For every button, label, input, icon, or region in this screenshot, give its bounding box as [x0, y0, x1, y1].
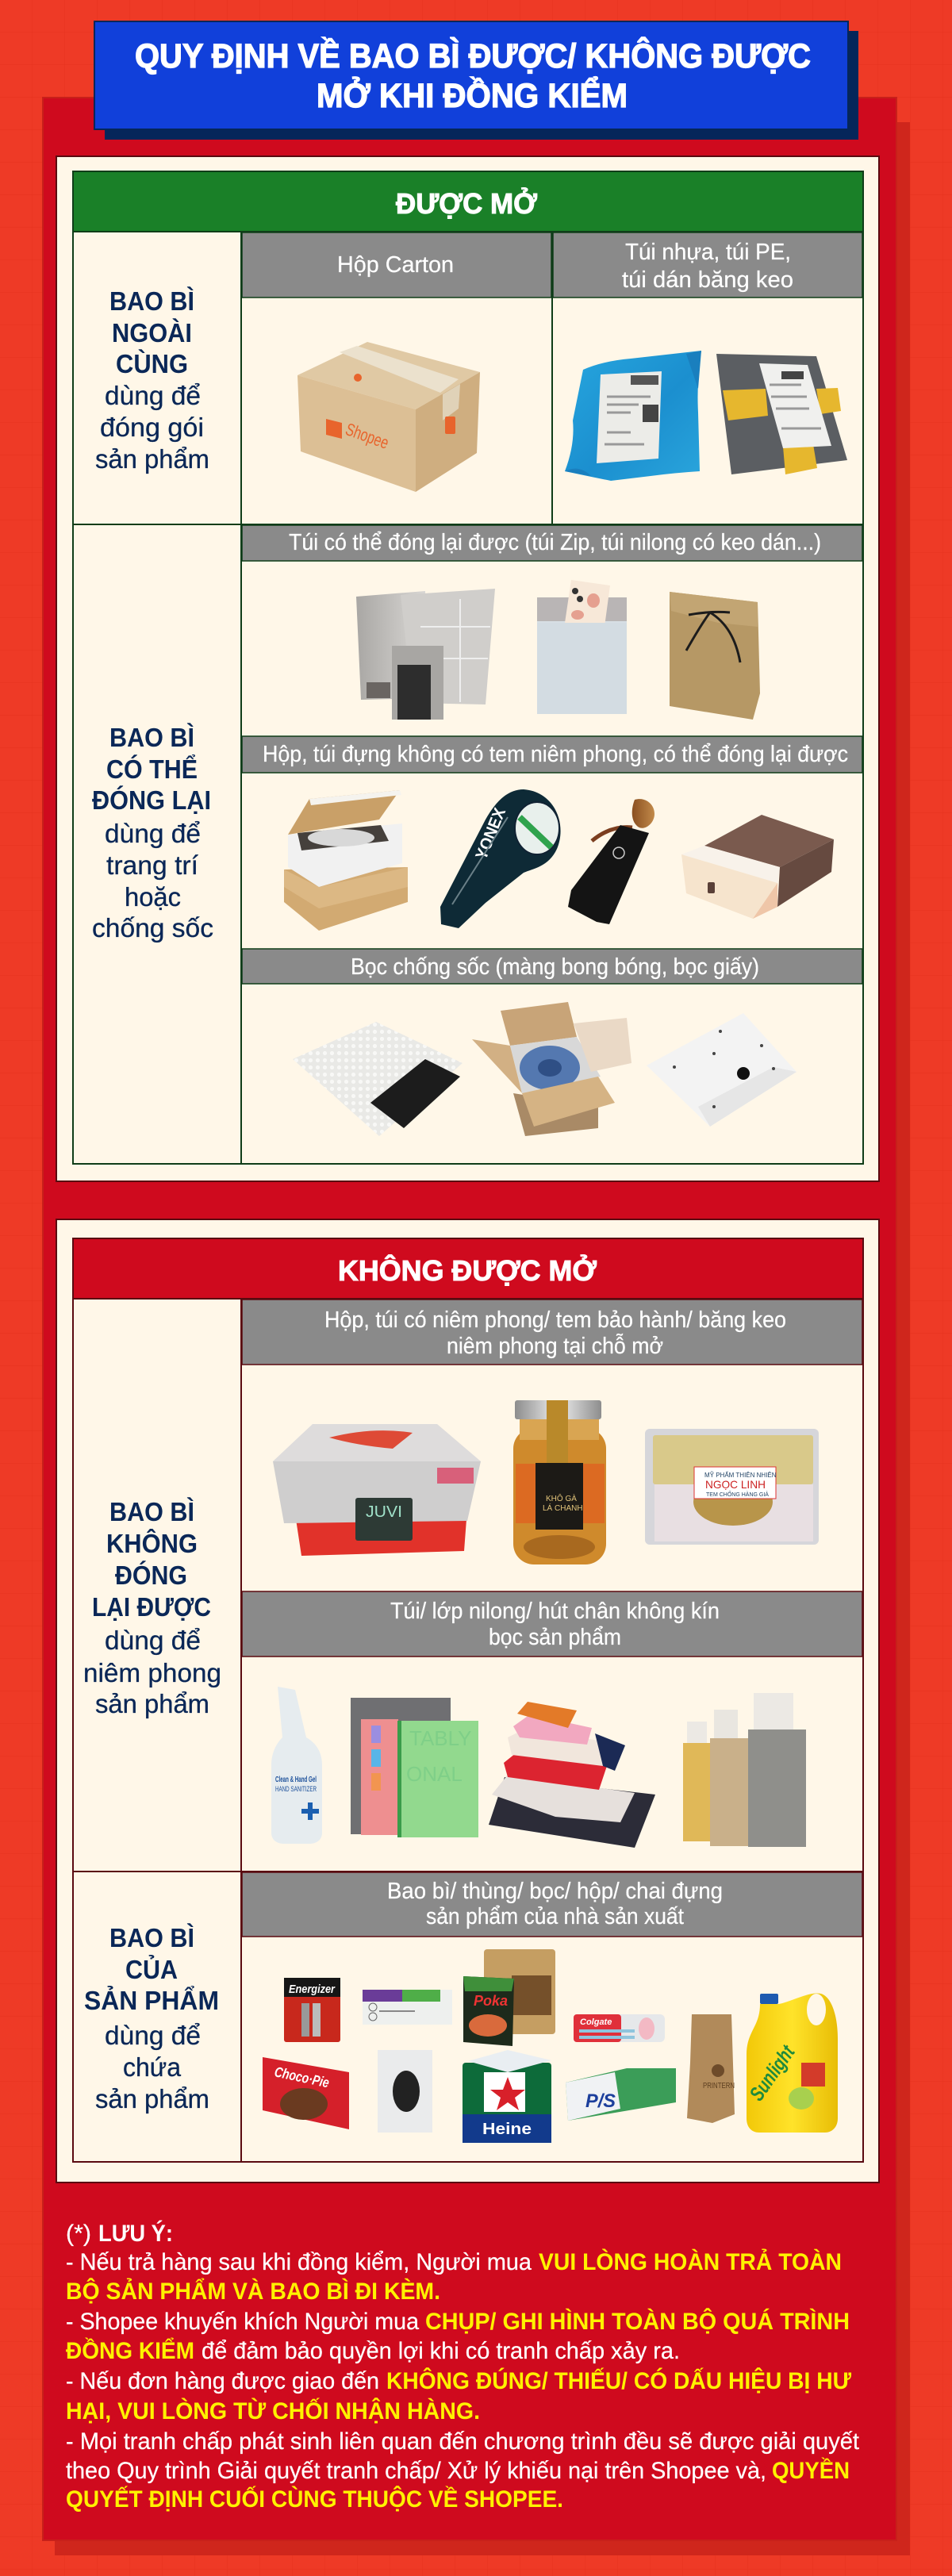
row label: bao bì không đóng lại được: KHÔNG: [106, 1528, 198, 1558]
row label: bao bì không đóng lại được: niêm phong: [83, 1658, 221, 1687]
icon: sanitizer bottle: Clean & Hand Gel: [275, 1776, 317, 1784]
sub-header: bọc chống sốc: [242, 949, 862, 984]
heading: không được mở: KHÔNG ĐƯỢC MỞ: [338, 1253, 597, 1287]
row label: bao bì của sản phẩm: sản phẩm: [95, 2084, 209, 2113]
title banner: MỞ KHI ĐỒNG KIỂM: [317, 76, 628, 115]
row label: bao bì không đóng lại được: [83, 1497, 221, 1718]
icon: grey taped mailer: [716, 354, 847, 474]
icon: yonex racket bag: YONEX: [472, 805, 509, 862]
icon: energizer batteries: Energizer: [289, 1983, 336, 1996]
sub-header: bao bì thùng bọc hộp chai: sản phẩm của nhà sản xuất: [426, 1904, 684, 1929]
sub-header: hộp túi có niêm phong: Hộp, túi có niêm phong/ tem bảo hành/ băng keo: [324, 1307, 786, 1333]
column header: hộp carton: Hộp Carton: [337, 252, 454, 278]
sub-header: bọc chống sốc: Bọc chống sốc (màng bong bóng, bọc giấy): [351, 954, 759, 980]
icon: yonex racket bag: [440, 789, 561, 928]
icon: sanitizer bottle: HAND SANITIZER: [275, 1785, 317, 1793]
notes: lưu ý: BỘ SẢN PHẨM VÀ BAO BÌ ĐI KÈM.: [66, 2278, 440, 2305]
notes: lưu ý: [66, 2220, 860, 2513]
icon: blue plastic mailer: [565, 351, 701, 481]
notes: lưu ý: KHÔNG ĐÚNG/ THIẾU/ CÓ DẤU HIỆU BỊ HƯ: [386, 2367, 851, 2394]
panel: được mở: [56, 156, 879, 1181]
icon: mouse box: [378, 2050, 432, 2133]
row label: bao bì ngoài cùng: đóng gói: [100, 413, 204, 442]
icon: sanitizer bottle: [271, 1687, 322, 1844]
icon: bubble mailer with phone: [537, 580, 627, 714]
icon: sealed jar: LÁ CHANH: [543, 1503, 583, 1513]
notes: lưu ý: để đảm bảo quyền lợi khi có tranh chấp xảy ra.: [202, 2338, 680, 2364]
column header: hộp carton: [242, 232, 551, 298]
icon: sealed cosmetic jar: NGỌC LINH: [705, 1478, 766, 1491]
heading: được mở: ĐƯỢC MỞ: [396, 186, 537, 220]
icon: sunlight bottle: [744, 1994, 838, 2133]
column header: túi nhựa: [553, 232, 862, 298]
notes: lưu ý: CHỤP/ GHI HÌNH TOÀN BỘ QUÁ TRÌNH: [425, 2308, 850, 2335]
notes: lưu ý: ĐỒNG KIỂM: [66, 2337, 194, 2364]
sub-header: túi có thể đóng lại: [242, 525, 862, 561]
icon: frosted zip bags: [356, 589, 495, 720]
notes: lưu ý: QUYỀN: [772, 2457, 850, 2484]
row label: bao bì của sản phẩm: SẢN PHẨM: [84, 1986, 219, 2015]
icon: drawer box: [681, 815, 834, 919]
notes: lưu ý: - Nếu trả hàng sau khi đồng kiểm, Người mua: [66, 2249, 532, 2275]
notes: lưu ý: (*): [66, 2221, 91, 2247]
icon: coffee kraft bag: [687, 2014, 735, 2123]
row label: bao bì ngoài cùng: BAO BÌ: [109, 286, 194, 316]
icon: colgate toothbrush pack: Colgate: [580, 2017, 612, 2027]
notes: lưu ý: - Shopee khuyến khích Người mua: [66, 2309, 419, 2335]
row label: bao bì có thể đóng lại: [92, 723, 213, 942]
icon: sealed cosmetic jar: [645, 1429, 819, 1545]
row label: bao bì ngoài cùng: dùng để: [105, 381, 201, 410]
row label: bao bì không đóng lại được: ĐÓNG: [115, 1561, 187, 1590]
notes: lưu ý: - Nếu đơn hàng được giao đến: [66, 2368, 379, 2394]
icon: vacuum rice bags: [683, 1693, 806, 1847]
icon: ps toothpaste box: P/S: [585, 2090, 616, 2112]
title banner: [94, 21, 858, 140]
notes: lưu ý: VUI LÒNG HOÀN TRẢ TOÀN: [539, 2248, 842, 2275]
row label: bao bì có thể đóng lại: BAO BÌ: [109, 723, 194, 752]
row label: bao bì có thể đóng lại: chống sốc: [92, 913, 213, 942]
title banner: QUY ĐỊNH VỀ BAO BÌ ĐƯỢC/ KHÔNG ĐƯỢC: [135, 36, 811, 75]
icon: sunlight bottle: Sunlight: [744, 2040, 800, 2105]
icon: wrapped books: ONAL: [406, 1762, 463, 1786]
icon: sealed jar: [513, 1400, 606, 1564]
icon: kraft food pouch: [484, 1949, 555, 2034]
icon: choco pie box: [263, 2057, 349, 2129]
icon: sealed cosmetic jar: TEM CHỐNG HÀNG GIẢ: [706, 1490, 769, 1498]
table grid: [73, 232, 863, 1164]
sub-header: hộp túi có niêm phong: niêm phong tại chỗ mở: [447, 1333, 663, 1359]
heading: không được mở: [73, 1238, 863, 1299]
icon: bubble wrap bag with black box: [293, 1022, 463, 1136]
card background: [56, 1219, 879, 2182]
notes: lưu ý: LƯU Ý:: [98, 2220, 173, 2247]
icon: stacked shoe boxes: [284, 790, 408, 931]
row label: bao bì không đóng lại được: LẠI ĐƯỢC: [92, 1592, 211, 1622]
icon: shopee carton box: [298, 342, 480, 492]
icon: energizer batteries: [284, 1978, 340, 2042]
icon: wrapped books: TABLY: [409, 1726, 472, 1750]
row label: bao bì ngoài cùng: [95, 286, 209, 474]
icon: ps toothpaste box: [566, 2068, 676, 2121]
sub-header: hộp túi không có tem: Hộp, túi đựng không có tem niêm phong, có thể đóng lại được: [263, 742, 848, 767]
icon: choco pie box: Choco·Pie: [273, 2063, 331, 2090]
icon: open cardboard box with bubble wrap: [472, 1002, 631, 1136]
icon: kraft gift bag: [670, 592, 760, 720]
column header: túi nhựa: túi dán băng keo: [622, 267, 793, 293]
row label: bao bì của sản phẩm: dùng để: [105, 2021, 201, 2050]
sub-header: túi lớp nilong hút chân không: [242, 1591, 862, 1657]
icon: colgate toothbrush pack: [574, 2014, 665, 2042]
sub-header: túi có thể đóng lại: Túi có thể đóng lại được (túi Zip, túi nilong có keo dán...): [289, 530, 821, 555]
row label: bao bì có thể đóng lại: ĐÓNG LẠI: [92, 785, 211, 815]
row label: bao bì không đóng lại được: dùng để: [105, 1626, 201, 1655]
row label: bao bì của sản phẩm: [84, 1923, 219, 2113]
icon: poka snack bag: [463, 1975, 551, 2046]
sub-header: hộp túi có niêm phong: [242, 1300, 862, 1365]
icon: sealed jar: KHÔ GÀ: [546, 1493, 577, 1503]
icon: wrapped books: [351, 1698, 478, 1837]
sub-header: hộp túi không có tem: [242, 736, 862, 773]
notes: lưu ý: theo Quy trình Giải quyết tranh chấp/ Xử lý khiếu nại trên Shopee và,: [66, 2458, 766, 2484]
row label: bao bì không đóng lại được: BAO BÌ: [109, 1497, 194, 1526]
icon: sealed gift box: [273, 1424, 481, 1556]
row label: bao bì ngoài cùng: sản phẩm: [95, 444, 209, 474]
icon: heineken can pack: [463, 2050, 551, 2143]
sub-header: túi lớp nilong hút chân không: bọc sản phẩm: [489, 1625, 621, 1650]
row label: bao bì ngoài cùng: CÙNG: [116, 349, 188, 378]
table grid: [73, 1299, 863, 2162]
icon: coffee kraft bag: PRINTERN: [703, 2082, 735, 2090]
row label: bao bì của sản phẩm: CỦA: [125, 1955, 178, 1984]
icon: black folded umbrella: [568, 799, 654, 924]
row label: bao bì có thể đóng lại: hoặc: [125, 882, 181, 912]
sub-header: bao bì thùng bọc hộp chai: Bao bì/ thùng/ bọc/ hộp/ chai đựng: [387, 1879, 723, 1904]
icon: poka snack bag: Poka: [474, 1993, 508, 2009]
row label: bao bì có thể đóng lại: CÓ THỂ: [106, 754, 198, 784]
notes: lưu ý: HẠI, VUI LÒNG TỪ CHỐI NHẬN HÀNG.: [66, 2397, 480, 2424]
row label: bao bì của sản phẩm: BAO BÌ: [109, 1923, 194, 1952]
icon: vacuum bagged clothes: [489, 1702, 655, 1848]
icon: white paper wrap: [647, 1013, 797, 1127]
row label: bao bì ngoài cùng: NGOÀI: [112, 318, 192, 347]
row label: bao bì có thể đóng lại: dùng để: [105, 819, 201, 848]
notes: lưu ý: QUYẾT ĐỊNH CUỐI CÙNG THUỘC VỀ SHOPEE.: [66, 2486, 563, 2513]
heading: được mở: [73, 171, 863, 232]
row label: bao bì của sản phẩm: chứa: [123, 2052, 182, 2082]
sub-header: bao bì thùng bọc hộp chai: [242, 1872, 862, 1937]
row label: bao bì có thể đóng lại: trang trí: [106, 850, 198, 880]
icon: scissors card: [363, 1990, 452, 2025]
icon: sealed gift box: JUVI: [366, 1503, 402, 1521]
panel: không được mở: [56, 1219, 879, 2182]
card background: [56, 156, 879, 1181]
sub-header: túi lớp nilong hút chân không: Túi/ lớp nilong/ hút chân không kín: [390, 1599, 720, 1624]
column header: túi nhựa: Túi nhựa, túi PE,: [625, 240, 791, 265]
icon: sealed cosmetic jar: MỸ PHẨM THIÊN NHIÊN: [704, 1472, 777, 1479]
notes: lưu ý: - Mọi tranh chấp phát sinh liên quan đến chương trình đều sẽ được giải quyết: [66, 2428, 860, 2455]
row label: bao bì không đóng lại được: sản phẩm: [95, 1689, 209, 1718]
icon: heineken can pack: Heine: [482, 2121, 532, 2138]
icon: shopee carton box: Shopee: [343, 419, 391, 453]
